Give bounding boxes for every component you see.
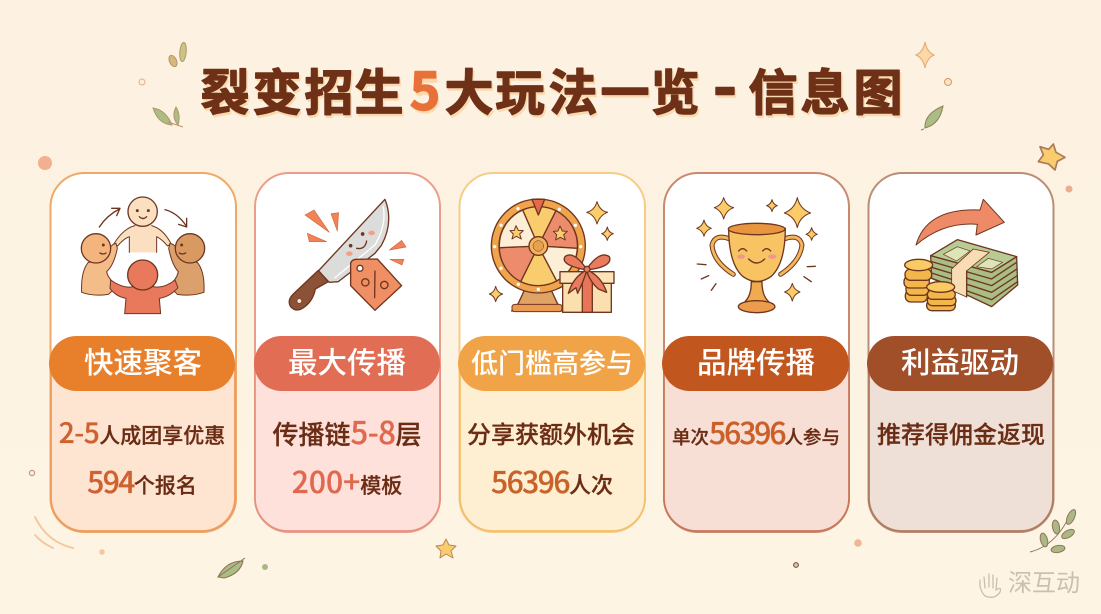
title: 裂 xyxy=(202,56,251,128)
body text: 推荐得佣金返现 xyxy=(877,415,1045,450)
title: 变 xyxy=(252,54,302,125)
pill heading xyxy=(662,336,849,391)
pill heading: 最大传播 xyxy=(288,340,406,382)
icon: prize wheel and gift xyxy=(489,199,614,312)
title: 法 xyxy=(548,54,598,125)
title: 一 xyxy=(602,56,651,128)
decorative branch: bottom right xyxy=(1030,508,1078,554)
title: 大 xyxy=(444,54,494,125)
body text xyxy=(273,408,421,502)
title: 5 xyxy=(410,50,440,125)
title: 息 xyxy=(802,56,851,128)
decorative star and dots: right xyxy=(38,144,1072,192)
decorative leaf: bottom xyxy=(218,558,268,578)
pill heading: 低门槛高参与 xyxy=(471,342,633,381)
pill heading xyxy=(49,336,235,391)
title: 玩 xyxy=(495,54,545,125)
icon: arrow, cash and coins xyxy=(904,199,1018,311)
body text: 传播链5-8层 xyxy=(273,408,421,453)
decorative sparkle and leaf: top right xyxy=(139,42,952,130)
title: 一 xyxy=(600,54,650,125)
title: 息 xyxy=(800,54,850,125)
pill heading: 利益驱动 xyxy=(901,340,1019,382)
pill heading: 品牌传播 xyxy=(697,340,815,382)
body text: 分享获额外机会 xyxy=(467,415,635,450)
decorative leaves: top left xyxy=(153,42,187,127)
body text: 200+模板 xyxy=(292,458,402,502)
title: 图 xyxy=(853,54,903,125)
title: 变 xyxy=(254,56,303,128)
title: 招 xyxy=(304,54,354,125)
title: 裂 xyxy=(200,54,250,125)
card 3: 低门槛高参与 xyxy=(458,173,645,532)
title: - xyxy=(714,36,739,132)
body text: 单次56396人参与 xyxy=(672,409,840,453)
body text: 56396人次 xyxy=(491,458,613,502)
title: 生 xyxy=(354,54,404,125)
title xyxy=(200,34,904,132)
card 2: 最大传播 xyxy=(254,173,440,532)
title: 生 xyxy=(356,56,405,128)
title: 信 xyxy=(750,56,799,128)
title: 信 xyxy=(748,54,798,125)
title: 法 xyxy=(550,56,599,128)
icon: knife and discount tag xyxy=(289,199,406,310)
title: 图 xyxy=(855,56,904,128)
pill heading xyxy=(458,336,645,391)
title: 览 xyxy=(650,54,700,125)
decorative star: bottom xyxy=(436,539,862,567)
title: 大 xyxy=(446,56,495,128)
pill heading xyxy=(254,336,440,391)
card 1: 快速聚客 xyxy=(49,173,236,532)
title: - xyxy=(713,34,737,130)
decorative swooshes: bottom left xyxy=(29,470,105,555)
body text: 594个报名 xyxy=(87,458,197,502)
card 4: 品牌传播 xyxy=(662,173,849,532)
title: 5 xyxy=(412,56,441,128)
pill heading xyxy=(867,336,1053,391)
body text xyxy=(59,412,225,502)
title: 招 xyxy=(306,56,355,128)
body text xyxy=(467,415,635,502)
pill heading: 快速聚客 xyxy=(84,340,202,382)
title: 览 xyxy=(652,56,701,128)
title: 玩 xyxy=(497,56,546,128)
icon: smiling trophy xyxy=(697,198,817,313)
body text: 2-5人成团享优惠 xyxy=(59,412,225,452)
card 5: 利益驱动 xyxy=(867,173,1054,532)
icon: people circle xyxy=(81,197,205,314)
watermark: 深互动 xyxy=(1008,563,1080,598)
